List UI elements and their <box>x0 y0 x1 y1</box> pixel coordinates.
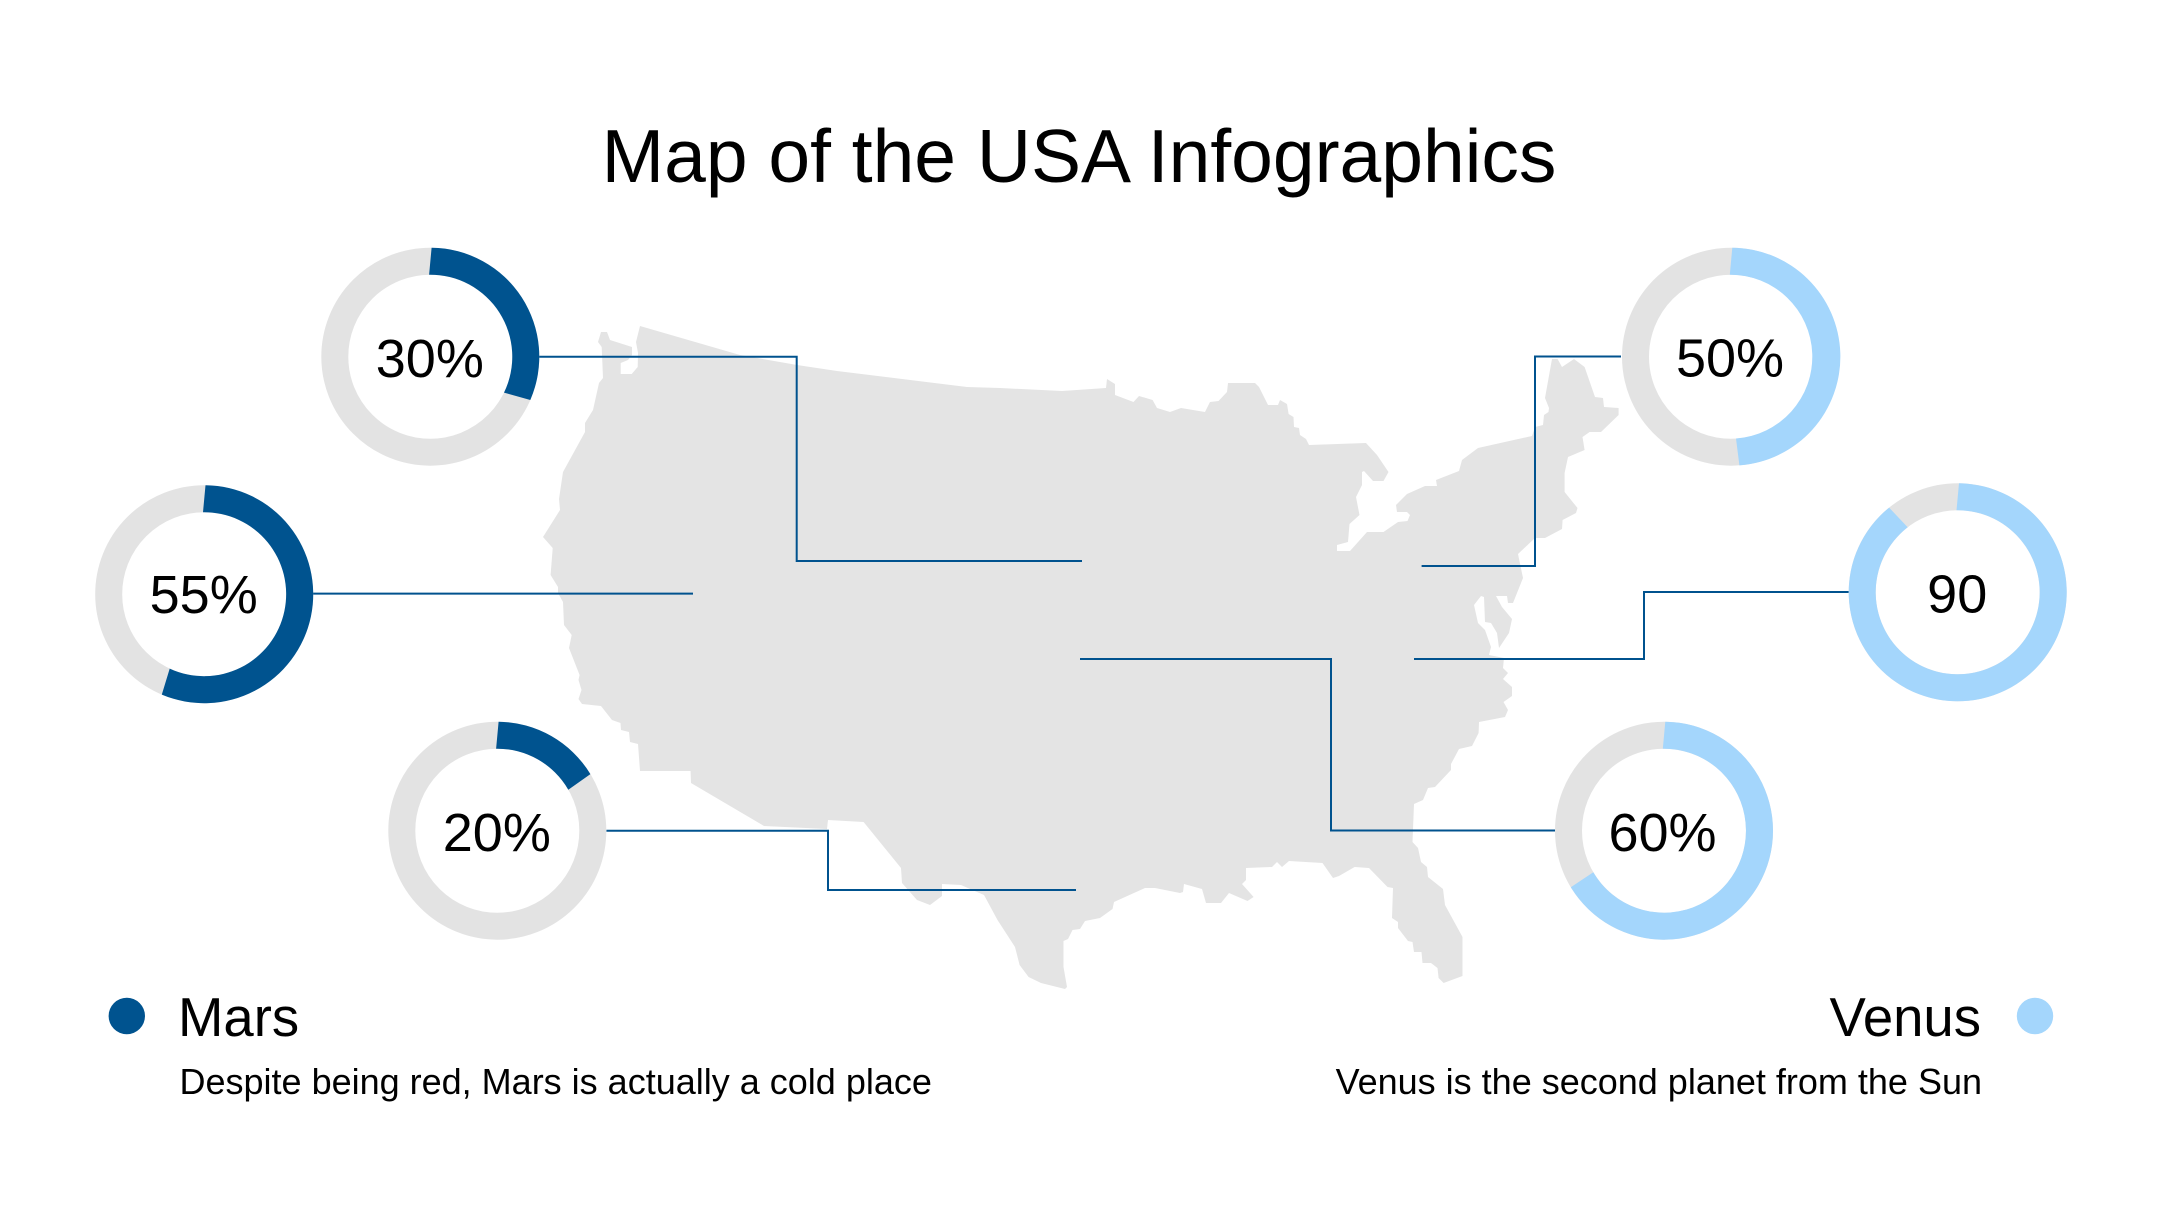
donut: 90: 90 <box>1927 564 1987 624</box>
Venus heading: Venus <box>1829 987 1981 1048</box>
legend: Venus <box>1336 987 2053 1102</box>
donut: 90 <box>1849 483 2067 701</box>
donut: 55%: 55% <box>150 565 258 625</box>
Mars heading: Mars <box>178 987 299 1048</box>
connector: 20% <box>606 831 1076 890</box>
connector lines <box>313 356 1849 890</box>
donut: 50% <box>1636 248 1840 465</box>
donut: 60%: 60% <box>1608 803 1717 863</box>
donut: 20% <box>402 722 593 926</box>
donut: 50%: 50% <box>1676 329 1784 389</box>
legend: Mars <box>109 987 932 1102</box>
Mars description: Despite being red, Mars is actually a cold place <box>180 1061 932 1102</box>
icon: Mars dot <box>109 998 145 1034</box>
donut: 30%: 30% <box>376 329 484 389</box>
connector: 55% <box>313 593 693 595</box>
Venus description: Venus is the second planet from the Sun <box>1336 1061 1982 1102</box>
donut: 30% <box>335 248 539 452</box>
connector: 30% <box>539 357 1082 561</box>
donut: 20%: 20% <box>443 803 551 863</box>
icon: Venus dot <box>2017 998 2053 1034</box>
connector: 50% <box>1422 356 1621 566</box>
donut: 55% <box>109 485 313 703</box>
title: Map of the USA Infographics <box>602 114 1556 198</box>
donut: 60% <box>1568 722 1773 940</box>
connector: 60% <box>1080 659 1555 830</box>
connector: 90 <box>1414 592 1849 659</box>
map of the USA <box>543 326 1619 989</box>
